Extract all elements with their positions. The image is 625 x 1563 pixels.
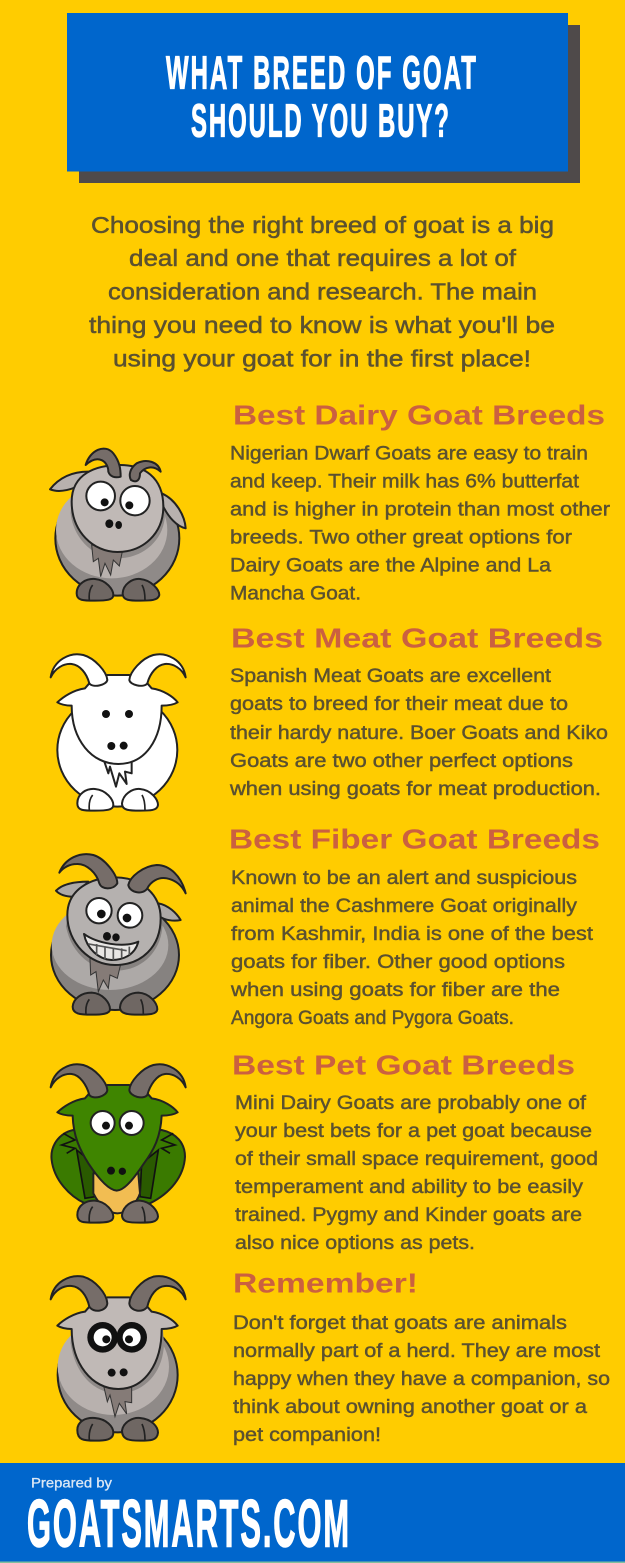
text: meat: Spanish Meat Goats are excellent bbox=[230, 665, 552, 687]
icon: goat with black-ringed eyes bbox=[51, 1276, 186, 1441]
text: pet: Mini Dairy Goats are probably one of bbox=[235, 1092, 587, 1114]
heading: dairy: Best Dairy Goat Breeds bbox=[233, 400, 605, 430]
heading: pet: Best Pet Goat Breeds bbox=[232, 1050, 575, 1080]
heading: fiber: Best Fiber Goat Breeds bbox=[229, 824, 600, 854]
text: fiber: goats for fiber. Other good options bbox=[231, 951, 565, 973]
title: SHOULD YOU BUY? bbox=[191, 95, 449, 147]
text: pet: trained. Pygmy and Kinder goats are bbox=[235, 1204, 582, 1226]
title bbox=[166, 47, 476, 147]
text: remember: happy when they have a companion, so bbox=[233, 1368, 610, 1390]
text: fiber: animal the Cashmere Goat originally bbox=[231, 895, 577, 917]
text: remember bbox=[233, 1312, 610, 1446]
text: pet: also nice options as pets. bbox=[235, 1232, 475, 1254]
icon: smiling fiber goat bbox=[51, 854, 186, 1015]
text: dairy: and keep. Their milk has 6% butterfat bbox=[230, 470, 580, 492]
text: remember: Don't forget that goats are animals bbox=[233, 1312, 567, 1334]
text: dairy: breeds. Two other great options for bbox=[230, 526, 573, 548]
intro paragraph: consideration and research. The main bbox=[108, 278, 537, 304]
intro paragraph bbox=[89, 212, 555, 372]
panel: fiber goats bbox=[51, 824, 600, 1029]
title: WHAT BREED OF GOAT bbox=[166, 47, 476, 99]
text: meat: when using goats for meat production. bbox=[229, 778, 601, 800]
text: pet: your best bets for a pet goat because bbox=[235, 1120, 592, 1142]
footer band bbox=[0, 1463, 625, 1563]
text: remember: think about owning another goat or a bbox=[233, 1396, 587, 1418]
intro paragraph: Choosing the right breed of goat is a big bbox=[91, 212, 554, 238]
icon: grey dairy goat bbox=[50, 449, 186, 601]
panel: pet goats bbox=[51, 1050, 598, 1254]
text: remember: normally part of a herd. They are most bbox=[233, 1340, 601, 1362]
text: pet: of their small space requirement, good bbox=[235, 1148, 598, 1170]
intro paragraph: using your goat for in the first place! bbox=[113, 346, 531, 372]
text: dairy: Mancha Goat. bbox=[230, 582, 361, 604]
text: fiber bbox=[230, 867, 594, 1029]
intro paragraph: thing you need to know is what you'll be bbox=[89, 312, 555, 338]
icon: white meat goat bbox=[51, 654, 186, 811]
text: pet: temperament and ability to be easily bbox=[235, 1176, 583, 1198]
text: meat: their hardy nature. Boer Goats and Kiko bbox=[230, 722, 608, 744]
text: fiber: Known to be an alert and suspicious bbox=[231, 867, 577, 889]
text: fiber: Angora Goats and Pygora Goats. bbox=[231, 1008, 514, 1029]
text: dairy: and is higher in protein than most other bbox=[230, 498, 611, 520]
title banner bbox=[67, 13, 580, 183]
text: meat: Goats are two other perfect options bbox=[230, 750, 573, 772]
text: pet bbox=[235, 1092, 598, 1254]
heading: meat: Best Meat Goat Breeds bbox=[231, 622, 603, 654]
website name: GOATSMARTS.COM bbox=[27, 1487, 349, 1562]
heading: remember: Remember! bbox=[233, 1268, 418, 1298]
intro paragraph: deal and one that requires a lot of bbox=[129, 245, 517, 271]
text: remember: pet companion! bbox=[233, 1424, 381, 1446]
icon: green dragon goat bbox=[51, 1064, 186, 1223]
panel: meat goats bbox=[51, 622, 608, 811]
panel: remember bbox=[51, 1268, 610, 1446]
text: meat: goats to breed for their meat due to bbox=[230, 693, 568, 715]
text: meat bbox=[229, 665, 608, 800]
prepared by label: Prepared by bbox=[31, 1474, 112, 1490]
text: dairy: Dairy Goats are the Alpine and La bbox=[230, 554, 551, 576]
text: fiber: from Kashmir, India is one of the best bbox=[231, 923, 594, 945]
text: dairy bbox=[230, 442, 611, 604]
text: fiber: when using goats for fiber are the bbox=[230, 979, 560, 1001]
panel: dairy goats bbox=[50, 400, 611, 604]
text: dairy: Nigerian Dwarf Goats are easy to train bbox=[230, 442, 588, 464]
